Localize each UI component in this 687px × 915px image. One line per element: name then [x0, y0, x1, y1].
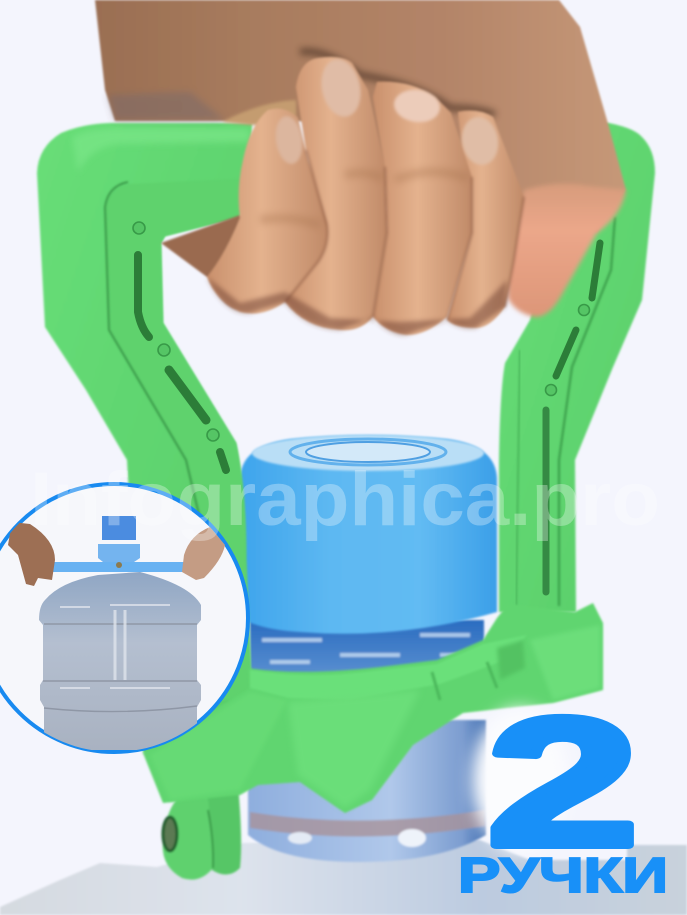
inset right hand: [182, 527, 225, 580]
bottle neck: [248, 620, 486, 862]
hand gripping the handle: [95, 0, 626, 335]
nail: [273, 114, 305, 166]
inset neck clamp: [98, 544, 140, 562]
blue bottle cap: [240, 435, 497, 634]
middle slot: [556, 330, 576, 376]
collar ribs: [432, 662, 497, 700]
rear wheel: [204, 785, 241, 875]
green collar and bracket: [143, 603, 603, 813]
collar shaded facet: [497, 640, 525, 680]
green handle: right arm: [499, 123, 655, 612]
ring finger: [373, 82, 472, 335]
nail: [316, 56, 366, 120]
upper slot: [138, 255, 149, 337]
large water bottle shoulder: [0, 840, 687, 915]
index finger: [207, 109, 328, 314]
green pivot wheels: [163, 785, 241, 880]
rivet dots: [133, 222, 219, 441]
green handle: left arm: [37, 123, 252, 760]
inset left hand: [8, 522, 55, 586]
number 2: 2: [487, 681, 639, 884]
wrist palm: [161, 215, 250, 313]
wrist shadow: [108, 92, 225, 120]
rivet dots: [546, 304, 590, 396]
long lower slot: [542, 410, 550, 592]
inner band of left arm: [105, 178, 252, 700]
front wheel: [163, 785, 213, 880]
bracket front facet: [288, 690, 420, 808]
nail: [392, 87, 442, 125]
inset cap: [102, 516, 136, 540]
wheel gap: [208, 810, 213, 868]
knuckle shadows: [260, 172, 468, 225]
lower slot: [169, 370, 206, 420]
band separator: [559, 217, 615, 606]
middle finger: [285, 56, 387, 330]
back of hand: [95, 0, 626, 233]
inset bar handle: [53, 562, 184, 572]
crease between hand and fingers: [300, 51, 495, 115]
finger creases: [285, 150, 524, 320]
inset jug: [39, 572, 201, 750]
inset circle: [0, 484, 248, 752]
collar upper rim: [250, 635, 527, 700]
thumb pad: [507, 184, 626, 317]
palm under fingers: [222, 100, 296, 125]
inset pin: [116, 562, 122, 568]
little finger: [447, 111, 524, 328]
bracket left facet: [150, 692, 287, 800]
bracket right block: [530, 625, 600, 700]
top-edge highlight: [72, 128, 250, 172]
band separator: [105, 182, 205, 540]
nail: [458, 114, 502, 168]
slot at cap: [220, 452, 226, 470]
caption: handles: РУЧКИ: [458, 848, 668, 903]
white halo behind number: [472, 708, 568, 852]
watermark: Infographica.pro: [30, 457, 660, 542]
upper slot: [592, 243, 600, 298]
finger base shading: [207, 277, 507, 335]
axle hole: [163, 817, 177, 851]
